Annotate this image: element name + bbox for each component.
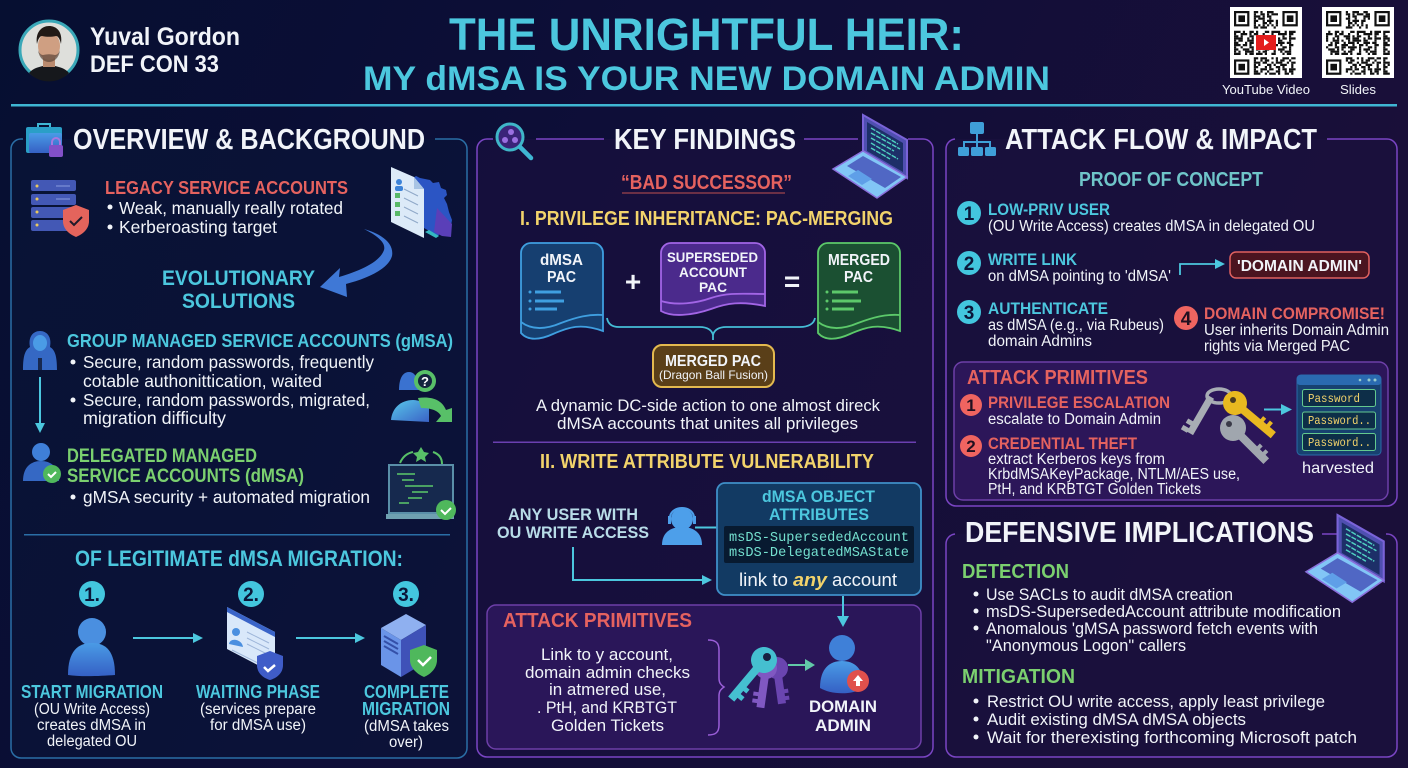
domain admin label: DOMAIN: [809, 697, 877, 716]
panel: dMSA object attributes: dMSA OBJECT: [762, 487, 876, 506]
mitigation list: MITIGATION: [962, 666, 1075, 688]
document: superseded account PAC: SUPERSEDED: [667, 249, 758, 265]
brace: [607, 318, 815, 340]
evolutionary solutions heading: EVOLUTIONARY: [162, 267, 315, 290]
panel: attack primitives: [487, 605, 921, 749]
step 3 complete migration: MIGRATION: [362, 699, 450, 719]
panel heading: KEY FINDINGS: [614, 124, 796, 156]
any user label: ANY USER WITH: [508, 505, 638, 524]
step 1 low-priv user: [957, 200, 1315, 235]
icon: server with shield: [31, 180, 89, 237]
password window: [1297, 375, 1381, 455]
icon: laptop: [833, 115, 907, 198]
detection list: "Anonymous Logon" callers: [986, 637, 1186, 655]
step 3 authenticate: [957, 299, 1164, 350]
legacy service accounts text: Kerberoasting target: [119, 217, 277, 237]
mitigation list: Audit existing dMSA dMSA objects: [987, 711, 1246, 729]
heading: write attribute vulnerability: II. WRITE ATTRIBUTE VULNERABILITY: [540, 451, 875, 473]
attack primitive text: . PtH, and KRBTGT: [537, 699, 677, 717]
step 4 domain compromise: [1174, 304, 1389, 355]
step 1 start migration: creates dMSA in: [37, 717, 146, 734]
attack primitive text: Link to y account,: [541, 646, 673, 664]
icon: magnifier: [497, 124, 531, 158]
dMSA text block: SERVICE ACCOUNTS (dMSA): [67, 466, 304, 487]
icon: users with key question: [391, 370, 452, 422]
arrow: keys to admin: [788, 659, 815, 671]
step 1 low-priv user: (OU Write Access) creates dMSA in delegated OU: [988, 218, 1315, 235]
QR code: slides: Slides: [1340, 82, 1376, 97]
privilege escalation: 1: [966, 396, 976, 415]
step 2 waiting phase: for dMSA use): [210, 717, 306, 734]
arrow: keys to passwords: [1264, 404, 1292, 415]
step 3 complete migration: [362, 581, 450, 751]
step 3 complete migration: (dMSA takes: [364, 718, 449, 735]
QR code: YouTube video: [1222, 7, 1310, 97]
credential theft: [960, 434, 1240, 498]
credential theft: KrbdMSAKeyPackage, NTLM/AES use,: [988, 466, 1240, 483]
step 3 authenticate: domain Admins: [988, 333, 1092, 350]
QR code: YouTube video: YouTube Video: [1222, 82, 1310, 97]
step 2 write link: WRITE LINK: [988, 250, 1078, 269]
document: superseded account PAC: [661, 243, 765, 315]
arrow: to domain admin: [1180, 259, 1225, 275]
arrow: attributes to domain admin: [837, 596, 849, 627]
step 2 write link: 2: [964, 254, 974, 275]
step 4 domain compromise: rights via Merged PAC: [1204, 338, 1350, 355]
privilege escalation: PRIVILEGE ESCALATION: [988, 393, 1170, 412]
gMSA text block: migration difficulty: [83, 408, 226, 428]
detection list: Use SACLs to audit dMSA creation: [986, 586, 1233, 604]
step 3 complete migration: 3.: [398, 585, 414, 606]
document: superseded account PAC: ACCOUNT: [679, 264, 747, 280]
detection list: [962, 561, 1341, 655]
panel: dMSA object attributes: msDS-SupersededAccount: [729, 530, 909, 546]
password window: Password: [1308, 392, 1360, 406]
harvested label: harvested: [1302, 460, 1374, 477]
speaker name: Yuval Gordon: [90, 23, 240, 51]
attack primitive text: domain admin checks: [525, 664, 690, 682]
step 3 authenticate: AUTHENTICATE: [988, 299, 1108, 318]
domain admin label: ADMIN: [815, 716, 871, 735]
domain admin label: [809, 697, 877, 735]
connector: user to attributes: [695, 526, 717, 528]
panel: dMSA object attributes: [717, 483, 921, 595]
dMSA text block: [67, 446, 370, 507]
avatar portrait: [20, 21, 78, 81]
icon: hierarchy: [958, 122, 996, 156]
panel heading: DEFENSIVE IMPLICATIONS: [965, 517, 1314, 549]
detection list: msDS-SupersededAccount attribute modification: [986, 603, 1341, 621]
password window: Password..: [1308, 414, 1371, 428]
PAC description: A dynamic DC-side action to one almost direck: [536, 396, 880, 415]
privilege escalation: [960, 393, 1170, 428]
panel: overview and background: [11, 124, 467, 758]
step 2 waiting phase: (services prepare: [200, 701, 316, 718]
icon: users with key question: ?: [421, 374, 429, 389]
step 4 domain compromise: User inherits Domain Admin: [1204, 322, 1389, 339]
callout: merged PAC: [653, 345, 774, 387]
attack primitive text: Golden Tickets: [551, 717, 664, 735]
document: dMSA PAC: dMSA: [540, 252, 583, 269]
speaker block: [20, 21, 240, 81]
icon: keys: [721, 642, 793, 709]
credential theft: CREDENTIAL THEFT: [988, 434, 1138, 453]
document: merged PAC: MERGED: [828, 252, 890, 269]
icon: dMSA user with check: [23, 443, 61, 483]
detection list: Anomalous 'gMSA password fetch events with: [986, 620, 1318, 638]
gMSA text block: [67, 331, 453, 428]
panel: dMSA object attributes: ATTRIBUTES: [769, 505, 869, 524]
evolutionary solutions heading: SOLUTIONS: [182, 290, 295, 313]
dMSA text block: gMSA security + automated migration: [83, 487, 370, 507]
mitigation list: [962, 666, 1357, 747]
document: merged PAC: PAC: [844, 269, 873, 286]
dMSA text block: DELEGATED MANAGED: [67, 446, 257, 467]
gMSA text block: GROUP MANAGED SERVICE ACCOUNTS (gMSA): [67, 331, 453, 351]
step 3 authenticate: as dMSA (e.g., via Rubeus): [988, 317, 1164, 334]
step 1 low-priv user: 1: [964, 204, 975, 225]
step 2 write link: on dMSA pointing to 'dMSA': [988, 268, 1171, 285]
panel heading: ATTACK FLOW & IMPACT: [1005, 124, 1318, 156]
PAC description: [536, 396, 880, 433]
attack primitive text: [525, 646, 690, 735]
QR code: slides: [1322, 7, 1394, 97]
mitigation list: Wait for therexisting forthcoming Microsoft patch: [987, 729, 1357, 747]
arrow: gMSA to dMSA: [35, 377, 45, 433]
document: dMSA PAC: [521, 243, 603, 339]
title: THE UNRIGHTFUL HEIR:: [449, 9, 964, 60]
step 3 complete migration: COMPLETE: [364, 682, 449, 702]
panel: attack primitives: ATTACK PRIMITIVES: [967, 367, 1148, 389]
title: [363, 9, 1050, 98]
panel: attack primitives: ATTACK PRIMITIVES: [503, 610, 692, 632]
step 1 start migration: (OU Write Access): [34, 701, 150, 718]
proof of concept heading: PROOF OF CONCEPT: [1079, 169, 1263, 191]
step 4 domain compromise: 4: [1181, 309, 1192, 330]
icon: laptop with code: [386, 447, 456, 520]
step 2 waiting phase: 2.: [243, 585, 259, 606]
arrow: step 2 to 3: [296, 633, 365, 643]
step 3 complete migration: over): [389, 734, 423, 751]
step 2 waiting phase: [196, 581, 320, 734]
panel: dMSA object attributes: link to: [739, 570, 788, 590]
step 1 start migration: START MIGRATION: [21, 682, 163, 702]
password window: Password..: [1308, 436, 1371, 450]
step 1 start migration: [21, 581, 163, 750]
step 3 authenticate: 3: [964, 303, 974, 324]
callout: merged PAC: MERGED PAC: [665, 353, 761, 370]
credential theft: PtH, and KRBTGT Golden Tickets: [988, 481, 1201, 498]
attack primitive text: in atmered use,: [549, 681, 666, 699]
icon: domain admin: [820, 635, 869, 693]
detection list: DETECTION: [962, 561, 1069, 583]
step 1 start migration: delegated OU: [47, 733, 137, 750]
brace: [708, 640, 724, 735]
step 4 domain compromise: DOMAIN COMPROMISE!: [1204, 304, 1385, 323]
title: MY dMSA IS YOUR NEW DOMAIN ADMIN: [363, 60, 1050, 98]
equals sign: =: [784, 266, 800, 297]
heading: privilege inheritance: I. PRIVILEGE INHERITANCE: PAC-MERGING: [520, 208, 893, 230]
panel: attack primitives: [954, 362, 1388, 500]
legacy service accounts text: LEGACY SERVICE ACCOUNTS: [105, 178, 348, 198]
step 1 low-priv user: LOW-PRIV USER: [988, 200, 1110, 219]
panel: key findings: [477, 115, 933, 757]
document: dMSA PAC: PAC: [547, 269, 576, 286]
mitigation list: Restrict OU write access, apply least privilege: [987, 693, 1325, 711]
PAC description: dMSA accounts that unites all privileges: [557, 414, 858, 433]
gMSA text block: cotable authonittication, waited: [83, 371, 322, 391]
arrow: step 1 to 2: [133, 633, 203, 643]
step 1 start migration: 1.: [84, 585, 100, 606]
privilege escalation: escalate to Domain Admin: [988, 411, 1161, 428]
document: merged PAC: [818, 243, 900, 339]
arrow: curved to evolutionary solutions: [320, 229, 392, 297]
bad successor label: “BAD SUCCESSOR”: [621, 172, 792, 194]
icon: key ring: [1181, 386, 1281, 470]
gMSA text block: Secure, random passwords, migrated,: [83, 390, 370, 410]
step 2 write link: [957, 250, 1171, 285]
arrow: user to link: [573, 547, 712, 585]
legacy service accounts text: [105, 178, 348, 237]
panel: dMSA object attributes: any: [793, 570, 828, 590]
panel heading: OVERVIEW & BACKGROUND: [73, 124, 425, 156]
icon: document with gear: [391, 167, 452, 238]
callout: merged PAC: (Dragon Ball Fusion): [659, 368, 768, 382]
callout: domain admin: 'DOMAIN ADMIN': [1237, 258, 1362, 275]
any user label: [497, 505, 649, 542]
document: superseded account PAC: PAC: [699, 279, 727, 295]
icon: laptop: [1306, 515, 1384, 602]
migration heading: OF LEGITIMATE dMSA MIGRATION:: [75, 546, 403, 571]
icon: hooded user: [23, 331, 57, 370]
event name: DEF CON 33: [90, 51, 219, 78]
credential theft: extract Kerberos keys from: [988, 451, 1165, 468]
step 2 waiting phase: WAITING PHASE: [196, 682, 320, 702]
panel: dMSA object attributes: msDS-DelegatedMSAState: [729, 545, 909, 561]
any user label: OU WRITE ACCESS: [497, 523, 649, 542]
icon: user with headset: [662, 508, 702, 545]
icon: folder with lock: [26, 124, 63, 157]
panel: defensive implications: [946, 515, 1397, 757]
credential theft: 2: [966, 437, 976, 456]
callout: domain admin: [1230, 252, 1369, 278]
evolutionary solutions heading: [162, 267, 315, 313]
gMSA text block: Secure, random passwords, frequently: [83, 352, 374, 372]
plus sign: +: [625, 266, 641, 297]
panel: attack flow and impact: [946, 122, 1397, 506]
panel: dMSA object attributes: account: [832, 570, 897, 590]
legacy service accounts text: Weak, manually really rotated: [119, 198, 343, 218]
